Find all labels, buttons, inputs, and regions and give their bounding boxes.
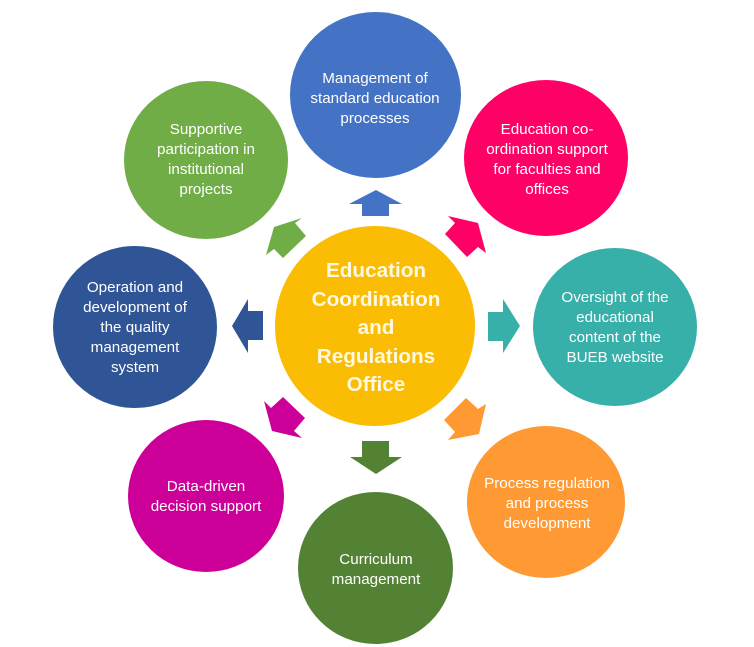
circle: oversight of website content: educational — [576, 309, 654, 326]
circle: oversight of website content: content of the — [569, 329, 661, 346]
circle: data-driven decision support — [128, 420, 284, 572]
circle: process regulation and development: Process regulation — [484, 475, 610, 492]
circle: quality management system: Operation and — [87, 279, 183, 296]
circle: process regulation and development — [467, 426, 625, 578]
circle: curriculum management: Curriculum — [339, 551, 413, 568]
circle: education co-ordination support: offices — [525, 181, 569, 198]
circle: quality management system — [53, 246, 217, 408]
arrow: right — [488, 299, 520, 353]
circle: curriculum management: management — [332, 571, 421, 588]
circle: management of standard education processes: Management of — [322, 70, 429, 87]
central circle: Education Coordination and Regulations Office: Office — [347, 373, 405, 396]
circle: management of standard education processes: standard education — [310, 90, 440, 107]
circle: oversight of website content: Oversight of the — [561, 289, 669, 306]
circle: management of standard education processes: processes — [340, 110, 410, 127]
circle: supportive participation: Supportive — [170, 121, 242, 138]
circle: data-driven decision support: decision support — [151, 498, 262, 515]
central circle: Education Coordination and Regulations Office — [275, 226, 475, 426]
arrow: down — [350, 441, 402, 474]
circle: education co-ordination support: Education co- — [501, 121, 593, 138]
circle: education co-ordination support — [464, 80, 628, 236]
arrow: upper left — [266, 218, 306, 258]
central circle: Education Coordination and Regulations Office: Coordination — [312, 288, 440, 311]
circle: quality management system: system — [111, 359, 159, 376]
circle: data-driven decision support: Data-driven — [167, 478, 245, 495]
circle: curriculum management — [298, 492, 453, 644]
circle: supportive participation: institutional — [168, 161, 244, 178]
circle: quality management system: the quality — [100, 319, 170, 336]
circle: oversight of website content — [533, 248, 697, 406]
central circle: Education Coordination and Regulations Office: and — [358, 316, 394, 339]
circle: quality management system: development of — [83, 299, 188, 316]
circle: process regulation and development: development — [504, 515, 591, 532]
arrow: left — [232, 299, 263, 353]
arrow: lower right — [444, 398, 486, 440]
arrow: up — [349, 190, 402, 216]
circle: supportive participation: projects — [179, 181, 233, 198]
circle: quality management system: management — [91, 339, 180, 356]
central circle: Education Coordination and Regulations Office: Regulations — [317, 345, 435, 368]
circle: management of standard education processes — [290, 12, 461, 178]
central circle: Education Coordination and Regulations Office: Education — [326, 259, 426, 282]
circle: education co-ordination support: for faculties and — [493, 161, 601, 178]
circle: supportive participation — [124, 81, 288, 239]
arrow: lower left — [264, 397, 305, 438]
circle: process regulation and development: and process — [506, 495, 589, 512]
circle: supportive participation: participation in — [157, 141, 255, 158]
circle: oversight of website content: BUEB website — [566, 349, 664, 366]
circle: education co-ordination support: ordination support — [486, 141, 609, 158]
arrow: upper right — [445, 216, 486, 257]
